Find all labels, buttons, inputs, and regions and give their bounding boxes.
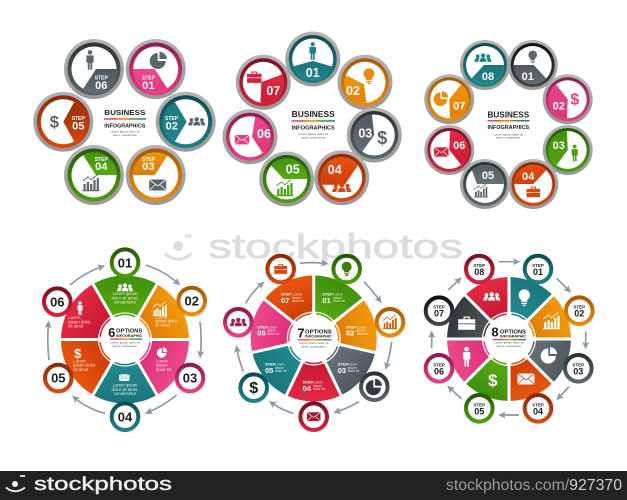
step 03 circle: STEP bbox=[142, 157, 156, 163]
badge 02: 02 bbox=[574, 309, 584, 319]
badge 03 bbox=[565, 355, 592, 382]
badge 02 bbox=[178, 288, 205, 314]
sector 07: ipsum bbox=[292, 296, 301, 300]
badge 02 bars bbox=[377, 309, 403, 336]
badge 04: 04 bbox=[118, 409, 133, 424]
badge 02 bbox=[566, 297, 593, 324]
sector 05: Lorem bbox=[275, 363, 285, 367]
badge 02: STEP bbox=[573, 305, 585, 310]
step 07 circle: 07 bbox=[453, 100, 465, 112]
step 02 circle bbox=[335, 55, 392, 110]
sector 03 bbox=[129, 324, 196, 398]
step 06 circle: 06 bbox=[453, 140, 465, 152]
sector 03: ipsum bbox=[156, 363, 168, 368]
centre label: Lorem ipsum dolor sit bbox=[110, 341, 140, 345]
step 05 circle: $ bbox=[50, 113, 60, 132]
badge 01 bbox=[525, 256, 551, 282]
sector 05: ipsum dolor bbox=[73, 363, 96, 368]
sector 03: Lorem bbox=[348, 363, 357, 367]
badge 04: STEP bbox=[532, 402, 544, 407]
step 02 circle: 02 bbox=[553, 100, 565, 112]
centre label: Lorem ipsum dolor sit bbox=[494, 341, 524, 345]
sector 05: sit amet bbox=[73, 367, 89, 372]
centre label: amet, consectetur bbox=[301, 344, 326, 348]
diagram: 6 options wheel bbox=[44, 249, 205, 430]
sector 04: Lorem ipsum bbox=[113, 383, 138, 388]
step 02 circle: STEP bbox=[165, 116, 179, 122]
sector 01: consectetur bbox=[114, 300, 137, 304]
step 01 circle bbox=[508, 40, 558, 90]
badge 07: STEP bbox=[433, 305, 445, 310]
centre label: 7 bbox=[297, 326, 305, 340]
sector 01: dolor sit bbox=[333, 299, 345, 303]
sector 06: 06 bbox=[257, 329, 266, 338]
sector 05 bbox=[465, 353, 520, 405]
sector 03 bbox=[523, 328, 575, 383]
step 06 circle: 06 bbox=[95, 80, 107, 92]
step 04 circle: 04 bbox=[328, 163, 342, 177]
diagram: eight numbered steps bbox=[424, 40, 593, 209]
arrows ring bbox=[237, 263, 392, 413]
centre heading bbox=[292, 110, 335, 140]
sector 04: Lorem bbox=[313, 381, 323, 385]
badge 05 bbox=[466, 395, 493, 422]
step 01 circle: 01 bbox=[306, 66, 320, 80]
sector 02: Lorem bbox=[155, 314, 168, 319]
centre label: 6 bbox=[108, 325, 115, 340]
step 03 circle: $ bbox=[377, 128, 387, 148]
step 03 circle: 03 bbox=[358, 126, 372, 140]
sector 06: Lorem bbox=[68, 315, 81, 320]
step 01 circle: 01 bbox=[522, 71, 534, 83]
badge 07: 07 bbox=[434, 309, 444, 319]
sector 04 bbox=[94, 362, 156, 403]
sector 02: Lorem bbox=[357, 325, 366, 329]
sector 02 bbox=[523, 295, 575, 350]
step 06 circle bbox=[424, 125, 474, 175]
step 04 circle: 04 bbox=[522, 171, 535, 183]
sector 06: dolor sit bbox=[267, 332, 279, 336]
step 02 circle bbox=[156, 92, 216, 152]
step 03 circle: 03 bbox=[142, 161, 155, 173]
sector 03: dolor sit bbox=[156, 367, 172, 372]
sector 02 bbox=[331, 299, 381, 359]
badge 04 bbox=[112, 403, 138, 430]
arrows ring bbox=[48, 265, 201, 413]
badge 01: 01 bbox=[118, 255, 132, 270]
badge 04 envelope bbox=[300, 403, 327, 430]
sector 01: Lorem bbox=[333, 293, 343, 297]
badge 08 bbox=[466, 256, 493, 282]
sector 07 bbox=[443, 295, 495, 350]
badge 03 pie bbox=[361, 373, 388, 400]
centre heading: Lorem ipsum dolor sit bbox=[110, 129, 140, 133]
sector 06: STEP bbox=[257, 324, 268, 329]
sector 04: STEP bbox=[303, 380, 313, 385]
centre heading: BUSINESS bbox=[488, 110, 529, 119]
badge 04 bbox=[525, 395, 551, 422]
sector 02: ipsum bbox=[357, 329, 366, 333]
step 04 circle bbox=[314, 150, 369, 205]
watermark bbox=[165, 228, 463, 266]
centre label: amet, consectetur bbox=[497, 344, 521, 348]
step 03 circle bbox=[344, 108, 402, 162]
step 02 circle: 02 bbox=[346, 84, 360, 98]
step 07 circle bbox=[424, 74, 474, 124]
sector 04: consectetur bbox=[114, 391, 137, 396]
badge 06 people bbox=[225, 309, 252, 336]
centre label: amet, consectetur bbox=[113, 344, 137, 348]
sector 05 bbox=[54, 324, 121, 398]
sector 07: STEP bbox=[281, 292, 292, 297]
centre heading: BUSINESS bbox=[104, 108, 145, 117]
sector 06 bbox=[246, 299, 297, 359]
step 07 circle bbox=[236, 55, 293, 110]
sector 03: ipsum bbox=[348, 366, 357, 370]
badge 06 bbox=[44, 288, 71, 315]
badge 05: STEP bbox=[473, 402, 485, 407]
badge 03: 03 bbox=[183, 371, 197, 386]
sector 03: 03 bbox=[338, 366, 346, 375]
step 06 circle bbox=[64, 39, 124, 99]
sector 01 bbox=[94, 276, 156, 317]
watermark: stockphotos bbox=[208, 228, 463, 266]
sector 06 bbox=[443, 328, 495, 383]
sector 01: STEP bbox=[322, 292, 333, 297]
arrows ring bbox=[432, 262, 586, 415]
badge 01 bulb bbox=[333, 256, 360, 282]
centre heading: amet, consectetur bbox=[301, 136, 326, 140]
diagram: 7 options wheel bbox=[225, 256, 403, 430]
badge 03 bbox=[177, 365, 203, 391]
badge 06: STEP bbox=[433, 362, 445, 367]
badge 06 bbox=[426, 355, 452, 382]
centre label: INFOGRAPHIC bbox=[305, 335, 332, 339]
sector 03: STEP bbox=[338, 362, 348, 367]
badge 08: STEP bbox=[473, 263, 485, 268]
sector 05 bbox=[248, 333, 312, 398]
diagram: six business steps bbox=[33, 39, 216, 205]
step 01 circle bbox=[285, 32, 340, 89]
sector 04: dolor sit amet, bbox=[112, 387, 138, 392]
badge 05 bbox=[45, 365, 72, 391]
sector 01: 01 bbox=[322, 296, 331, 305]
sector 07 bbox=[263, 270, 327, 329]
sector 03 bbox=[316, 333, 379, 398]
sector 01: dolor sit amet, bbox=[112, 295, 138, 300]
diagram: 8 options wheel bbox=[426, 256, 593, 422]
centre heading bbox=[488, 110, 530, 140]
centre heading: Lorem ipsum dolor sit bbox=[494, 132, 523, 136]
sector 02 bbox=[129, 281, 196, 355]
centre heading bbox=[104, 108, 146, 137]
sector 06: ipsum dolor bbox=[68, 319, 91, 324]
badge 02: 02 bbox=[184, 294, 199, 309]
sector 02: dolor sit bbox=[357, 332, 368, 336]
sector 05: dolor sit bbox=[275, 369, 287, 373]
badge 07 briefcase bbox=[267, 256, 294, 282]
sector 06: ipsum bbox=[267, 329, 276, 333]
sector 01: Lorem ipsum bbox=[113, 291, 138, 296]
centre label: 8 bbox=[491, 325, 499, 340]
sector 05: Lorem bbox=[73, 358, 86, 363]
centre label: INFOGRAPHIC bbox=[500, 334, 526, 338]
step 01 circle: 01 bbox=[142, 80, 155, 92]
centre label: OPTIONS bbox=[500, 329, 526, 335]
centre label bbox=[297, 326, 332, 348]
step 04 circle bbox=[508, 159, 558, 209]
sector 06 bbox=[54, 281, 121, 355]
sector 07: dolor sit bbox=[292, 299, 304, 303]
sector 06: Lorem bbox=[267, 325, 277, 329]
step 05 circle bbox=[33, 92, 93, 152]
footer bar bbox=[0, 471, 627, 500]
sector 03: Lorem bbox=[156, 358, 169, 363]
centre label: INFOGRAPHIC bbox=[116, 334, 143, 338]
sector 01 bbox=[300, 270, 364, 329]
centre heading: amet, consectetur bbox=[496, 136, 521, 140]
sector 04: ipsum bbox=[313, 384, 322, 388]
sector 01 bbox=[498, 273, 553, 325]
sector 05: STEP bbox=[265, 362, 276, 367]
badge 05 dollar bbox=[240, 374, 267, 401]
step 04 circle bbox=[64, 145, 124, 205]
badge 08: 08 bbox=[474, 267, 484, 277]
centre label: Lorem ipsum dolor sit bbox=[299, 341, 329, 345]
sector 07: 07 bbox=[281, 296, 289, 305]
badge 01 bbox=[112, 249, 138, 276]
centre label bbox=[108, 325, 143, 348]
sector 05: $ bbox=[74, 346, 82, 361]
sector 04 bbox=[288, 362, 340, 402]
centre heading: INFOGRAPHICS bbox=[292, 125, 335, 131]
badge 07 bbox=[426, 297, 452, 324]
sector 06: sit amet bbox=[68, 324, 84, 328]
footer bar: stockphotos.com/927370 bbox=[446, 477, 622, 494]
centre label: OPTIONS bbox=[116, 329, 142, 335]
step 04 circle: STEP bbox=[95, 157, 108, 163]
step 05 circle: 05 bbox=[482, 170, 494, 182]
step 05 circle bbox=[259, 152, 314, 206]
step 01 circle: STEP bbox=[142, 76, 156, 82]
sector 05: ipsum bbox=[275, 366, 284, 370]
sector 04: dolor sit bbox=[313, 387, 325, 391]
sector 05: $ bbox=[488, 371, 498, 390]
centre heading: INFOGRAPHICS bbox=[488, 125, 530, 131]
badge 06: 06 bbox=[50, 294, 65, 309]
sector 02: sit amet bbox=[155, 323, 171, 328]
badge 05: 05 bbox=[51, 371, 66, 386]
badge 06: 06 bbox=[434, 366, 444, 376]
sector 08 bbox=[465, 273, 520, 325]
step 04 circle: 04 bbox=[95, 161, 108, 173]
step 01 circle bbox=[126, 39, 186, 99]
step 02 circle: $ bbox=[570, 91, 579, 108]
badge 04: 04 bbox=[533, 406, 543, 416]
step 06 circle: 06 bbox=[257, 127, 271, 141]
badge 01: 01 bbox=[533, 267, 543, 277]
centre label: OPTIONS bbox=[305, 329, 332, 335]
sector 04 bbox=[498, 353, 553, 405]
centre heading: Lorem ipsum dolor sit bbox=[299, 132, 328, 136]
centre label bbox=[491, 325, 526, 348]
step 05 circle: 05 bbox=[72, 120, 84, 132]
step 05 circle: STEP bbox=[72, 116, 85, 122]
footer bar: stockphotos bbox=[34, 474, 172, 494]
sector 01: ipsum bbox=[333, 296, 342, 300]
badge 03: 03 bbox=[573, 366, 583, 376]
sector 02: 02 bbox=[346, 329, 354, 338]
step 07 circle: 07 bbox=[266, 84, 280, 98]
step 02 circle bbox=[543, 74, 593, 124]
step 05 circle: 05 bbox=[286, 162, 300, 176]
badge 05: 05 bbox=[474, 406, 484, 416]
step 08 circle bbox=[460, 40, 510, 90]
step 03 circle: 03 bbox=[553, 140, 565, 152]
badge 03: STEP bbox=[572, 362, 584, 367]
diagram: seven numbered steps bbox=[222, 32, 402, 206]
sector 03: dolor sit bbox=[348, 369, 359, 373]
sector 02: STEP bbox=[346, 324, 357, 329]
centre heading: INFOGRAPHICS bbox=[104, 123, 146, 129]
sector 02: ipsum dolor bbox=[155, 318, 178, 324]
badge 01: STEP bbox=[532, 263, 544, 268]
sector 04: 04 bbox=[303, 384, 312, 393]
badge 05 dollar: $ bbox=[249, 380, 258, 397]
step 05 circle bbox=[460, 159, 510, 209]
step 02 circle: 02 bbox=[166, 120, 178, 132]
step 08 circle: 08 bbox=[482, 71, 494, 83]
centre heading: BUSINESS bbox=[292, 110, 335, 119]
step 06 circle bbox=[222, 109, 280, 164]
step 03 circle bbox=[543, 125, 593, 175]
centre heading: amet, consectetur bbox=[113, 133, 137, 137]
step 03 circle bbox=[126, 145, 186, 205]
sector 07: Lorem bbox=[292, 293, 302, 297]
sector 05: 05 bbox=[265, 366, 273, 375]
step 06 circle: STEP bbox=[95, 76, 108, 82]
